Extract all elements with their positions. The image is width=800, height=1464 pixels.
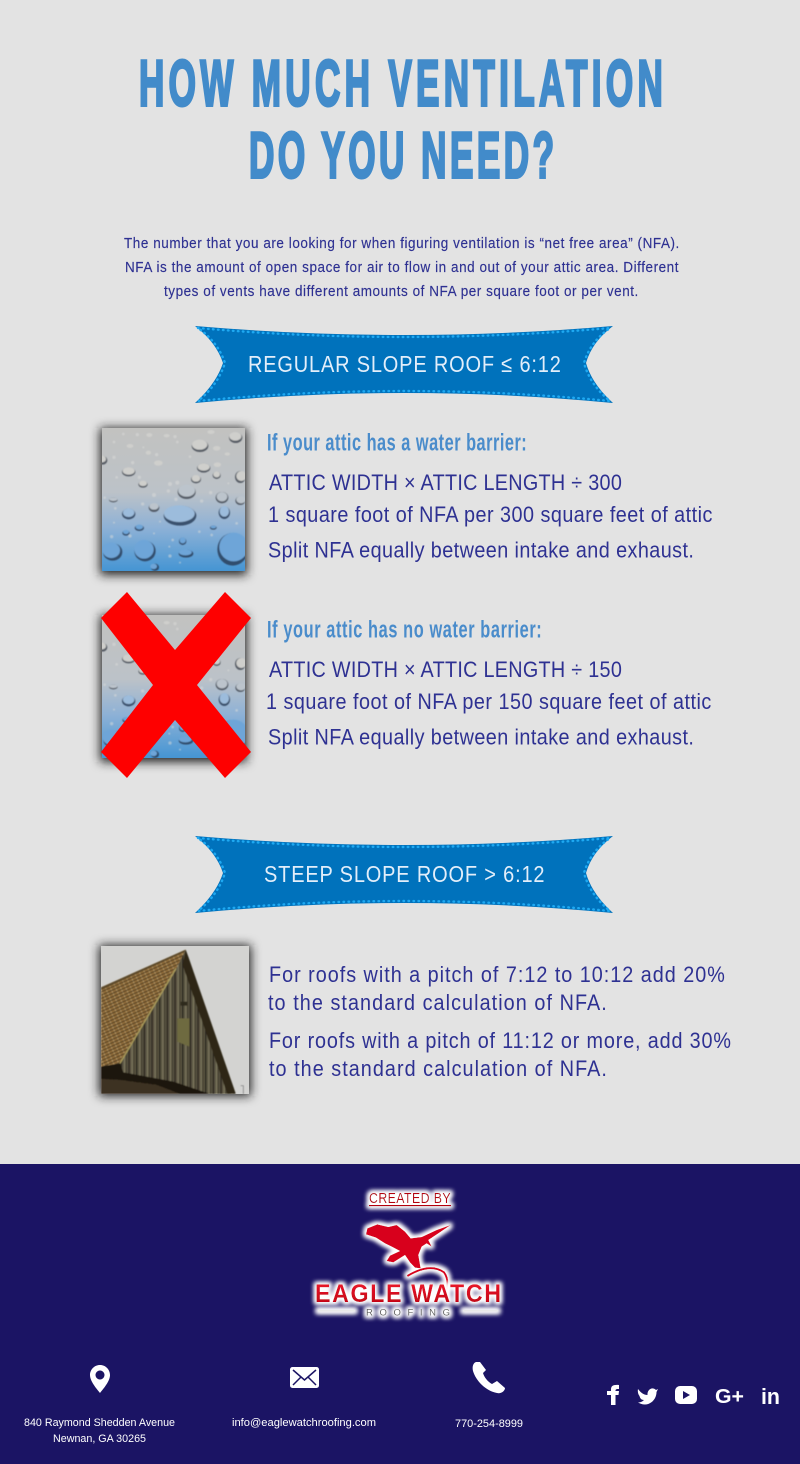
title: DO YOU NEED? xyxy=(249,120,554,192)
icon: facebook xyxy=(607,1385,619,1405)
panel: water barrier xyxy=(98,428,713,575)
heading: water barrier: If your attic has a water barrier: xyxy=(267,429,527,456)
formula and notes: 1 square foot of NFA per 150 square feet of attic xyxy=(266,690,712,714)
heading: no water barrier: If your attic has no water barrier: xyxy=(267,616,542,643)
icon: youtube xyxy=(675,1386,697,1404)
formula and notes: 1 square foot of NFA per 300 square feet of attic xyxy=(268,503,713,527)
banner: steep slope roof: STEEP SLOPE ROOF > 6:12 xyxy=(264,860,545,887)
formula and notes xyxy=(268,471,713,563)
social icons xyxy=(607,1384,780,1409)
contact: phone xyxy=(455,1362,523,1430)
formula and notes: Split NFA equally between intake and exhaust. xyxy=(268,725,694,750)
intro text block: The number that you are looking for when figuring ventilation is “net free area” (NFA). xyxy=(124,235,679,252)
text: pitch adjustments: to the standard calculation of NFA. xyxy=(268,991,607,1015)
intro text block xyxy=(124,235,679,300)
panel: steep slope xyxy=(99,945,731,1096)
created by label: CREATED BY xyxy=(369,1190,451,1206)
intro text block: types of vents have different amounts of NFA per square foot or per vent. xyxy=(164,283,638,300)
contact: address: Newnan, GA 30265 xyxy=(53,1433,146,1445)
text: pitch adjustments: For roofs with a pitch of 11:12 or more, add 30% xyxy=(269,1029,731,1053)
contact: email: info@eaglewatchroofing.com xyxy=(232,1417,376,1429)
icon: eagle xyxy=(366,1224,451,1296)
contact: email xyxy=(232,1367,376,1429)
contact: address: 840 Raymond Shedden Avenue xyxy=(24,1417,175,1429)
icon: envelope xyxy=(290,1367,319,1388)
formula and notes: ATTIC WIDTH × ATTIC LENGTH ÷ 150 xyxy=(269,658,622,682)
icon: google plus: G+ xyxy=(715,1386,744,1408)
logo: eagle watch roofing xyxy=(315,1224,501,1318)
text: pitch adjustments xyxy=(268,963,731,1081)
footer panel xyxy=(0,1164,800,1464)
title xyxy=(139,48,663,192)
contact: address xyxy=(24,1365,175,1445)
image: water droplets xyxy=(98,428,248,575)
icon: linkedin: in xyxy=(761,1384,780,1409)
tagline: ROOFING xyxy=(366,1308,450,1318)
banner: regular slope roof xyxy=(195,326,613,403)
text: pitch adjustments: to the standard calculation of NFA. xyxy=(269,1057,607,1081)
wordmark: EAGLE WATCH xyxy=(315,1280,501,1308)
icon: map pin xyxy=(90,1365,110,1393)
banner: steep slope roof xyxy=(195,836,613,913)
icon: twitter xyxy=(638,1388,658,1404)
intro text block: NFA is the amount of open space for air to flow in and out of your attic area. Different xyxy=(125,259,679,276)
formula and notes: Split NFA equally between intake and exhaust. xyxy=(268,538,694,563)
text: pitch adjustments: For roofs with a pitch of 7:12 to 10:12 add 20% xyxy=(269,963,725,987)
panel: no water barrier xyxy=(98,592,712,778)
title: HOW MUCH VENTILATION xyxy=(139,48,663,120)
contact: phone: 770-254-8999 xyxy=(455,1418,523,1430)
formula and notes xyxy=(266,658,712,750)
image: crossed-out water droplets xyxy=(98,592,251,778)
image: barn roof xyxy=(99,945,251,1096)
icon: phone handset xyxy=(473,1362,505,1393)
formula and notes: ATTIC WIDTH × ATTIC LENGTH ÷ 300 xyxy=(269,471,622,495)
banner: regular slope roof: REGULAR SLOPE ROOF ≤ 6:12 xyxy=(248,350,561,377)
